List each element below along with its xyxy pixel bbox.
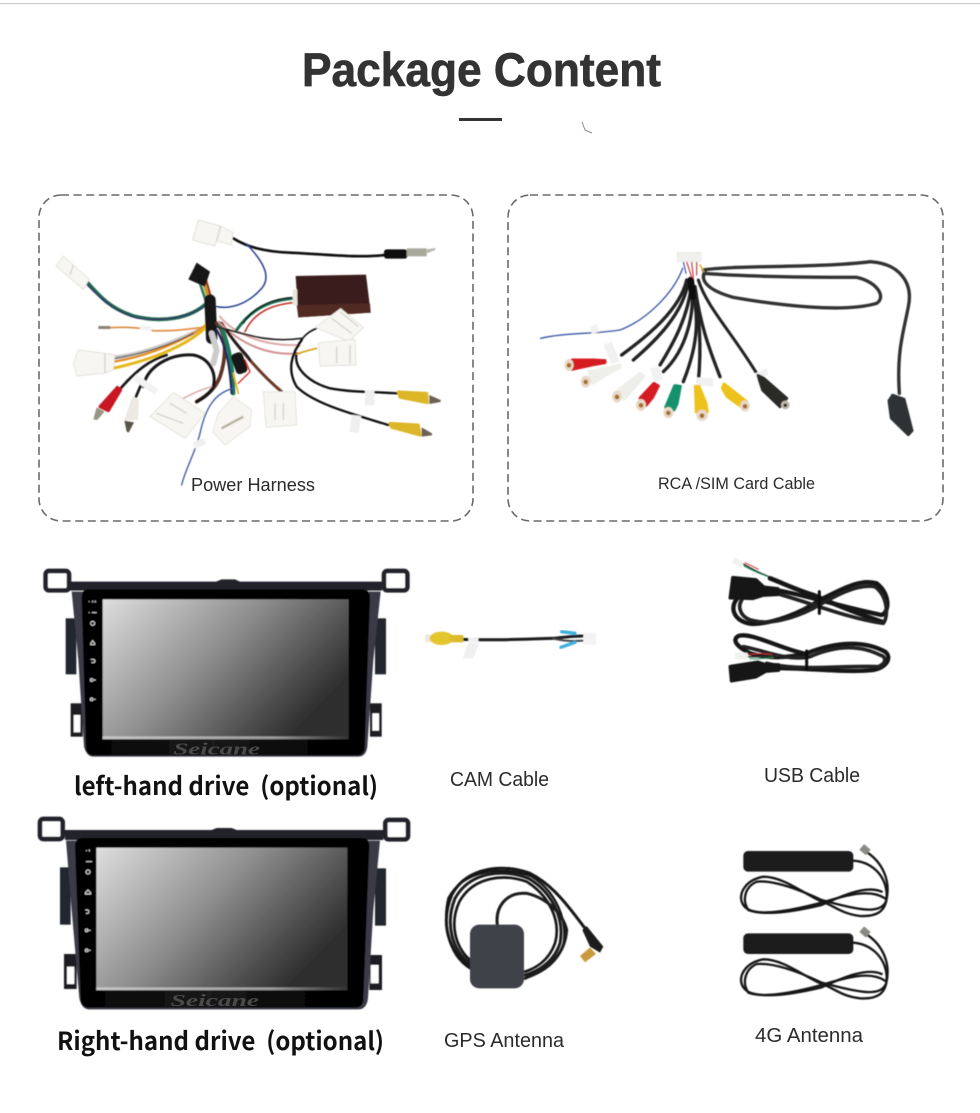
connector: top left white plug: [56, 256, 89, 289]
label: right-hand drive: Right-hand drive (optional): [57, 1022, 384, 1058]
SIM card connector: [889, 395, 912, 435]
title underline: [459, 118, 502, 121]
label: CAM Cable: CAM Cable: [450, 769, 549, 791]
label: Power Harness: Power Harness: [191, 475, 315, 495]
small stray wire mark: [582, 122, 592, 133]
antenna 1: [741, 844, 888, 916]
connector: right white plugs: [315, 308, 363, 366]
RCA cable photo: [541, 252, 912, 435]
GPS antenna photo: [446, 868, 603, 988]
screen: [96, 848, 347, 990]
label: 4G Antenna: 4G Antenna: [755, 1025, 864, 1047]
head unit: left-hand drive: [46, 571, 407, 759]
audio jack: [758, 375, 790, 409]
CAM cable photo: [425, 632, 596, 658]
RCA plugs: [564, 359, 750, 421]
label: USB Cable: USB Cable: [764, 765, 860, 787]
screen bottom reflection: [103, 736, 349, 739]
mounting frame and brackets: [46, 571, 407, 757]
label: RCA / SIM: RCA /SIM Card Cable: [658, 475, 815, 493]
mounting frame and brackets: [40, 819, 408, 1009]
black ISO plug: [188, 263, 210, 287]
panel: power harness: [39, 195, 473, 521]
label: left-hand drive: left-hand drive (optional): [74, 767, 378, 803]
lower bezel: [103, 739, 349, 755]
USB plug bottom: [730, 653, 779, 681]
lower bezel: [96, 990, 347, 1007]
label: GPS Antenna: GPS Antenna: [444, 1030, 565, 1052]
connector: top white plug: [192, 220, 233, 246]
screen bottom reflection: [96, 987, 347, 990]
white multi-pin plug: [677, 252, 701, 262]
connector: bottom white plugs: [150, 392, 297, 445]
side control icons: [89, 601, 97, 701]
USB plug top: [730, 557, 778, 599]
antenna plug: [384, 248, 435, 259]
bezel: [82, 589, 370, 755]
head unit: right-hand drive: [40, 819, 408, 1010]
yellow RCA plugs: [349, 390, 441, 437]
screen: [103, 599, 349, 739]
connector: left white plug: [73, 350, 115, 376]
power harness photo: [56, 220, 441, 485]
panel: RCA / SIM card cable: [508, 195, 943, 521]
watermark: Seicane: [173, 740, 260, 759]
red and white RCA plugs: [93, 374, 158, 433]
antenna puck: [470, 925, 524, 988]
watermark: Seicane: [171, 991, 259, 1010]
decoder box: [293, 275, 371, 317]
title: Package Content: [302, 43, 661, 96]
right-angle SMA connector: [580, 926, 603, 962]
side control icons: [85, 849, 92, 952]
antenna 2: [741, 926, 888, 998]
bezel: [75, 838, 369, 1008]
USB cables photo: [730, 557, 888, 681]
labels on wires: [590, 324, 768, 387]
4G antennas photo: [741, 844, 888, 998]
